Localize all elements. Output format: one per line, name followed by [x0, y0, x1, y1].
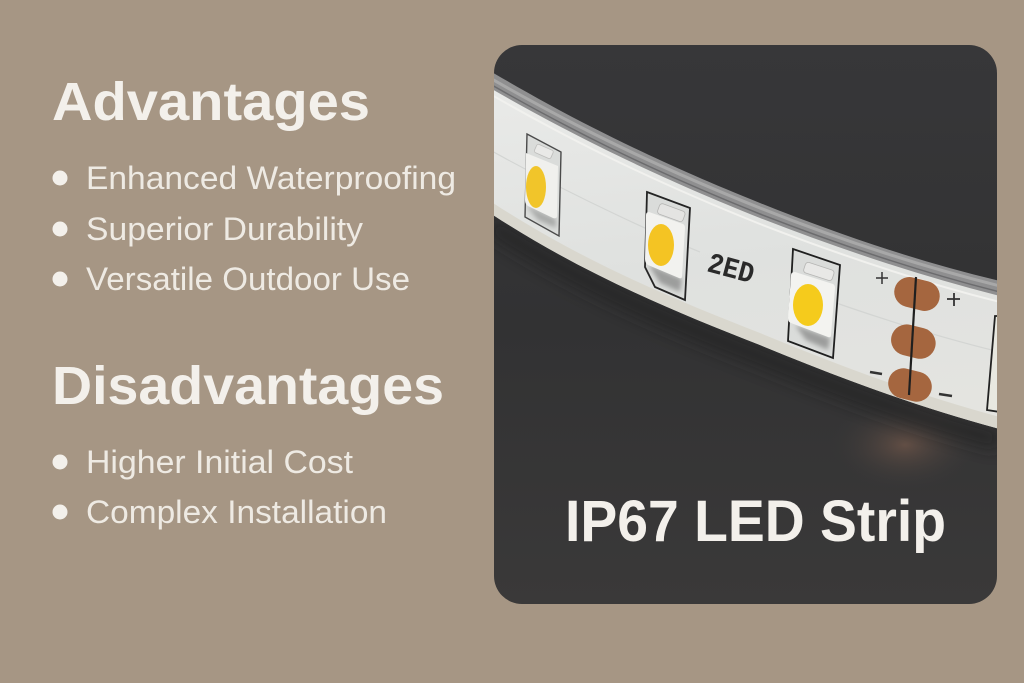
photo title: IP67 LED Strip: IP67 LED Strip [565, 489, 946, 554]
heading: Advantages: Advantages [52, 72, 370, 132]
advantages list: Enhanced Waterproofing [86, 160, 456, 196]
disadvantages list [52, 444, 387, 530]
heading: Disadvantages: Disadvantages [52, 356, 444, 416]
LED 3 [788, 249, 840, 358]
disadvantages list: Complex Installation [86, 494, 387, 530]
disadvantages list: Higher Initial Cost [86, 444, 353, 480]
advantages list: Versatile Outdoor Use [86, 261, 410, 297]
panel: LED strip photo [490, 45, 1000, 604]
cut line [909, 277, 916, 395]
LED strip clear casing [490, 71, 1000, 300]
advantages list: Superior Durability [86, 211, 363, 247]
LED 1 [525, 134, 561, 236]
polarity marks [870, 272, 960, 396]
LED 2 [645, 192, 690, 300]
printed strip label: 2ED [704, 248, 758, 292]
LED strip body [490, 88, 1000, 429]
partial LED 4 [986, 315, 997, 412]
advantages list [52, 160, 456, 297]
copper solder pads [888, 277, 940, 402]
